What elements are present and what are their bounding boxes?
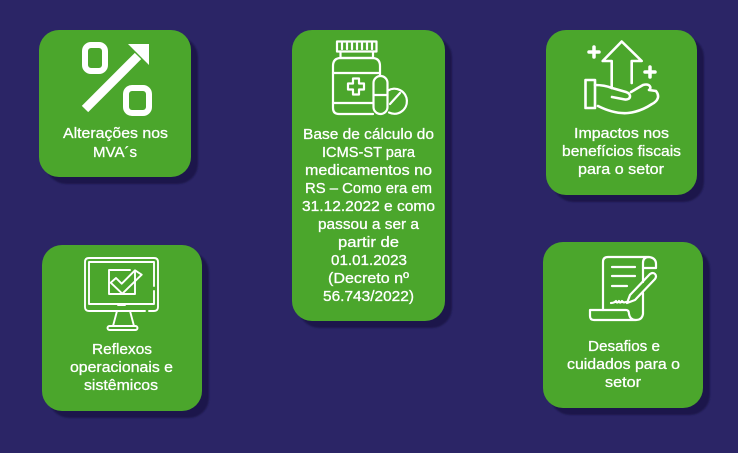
label: Base de cálculo do ICMS-ST text: Base de cálculo do — [303, 126, 434, 143]
label: Base de cálculo do ICMS-ST text: passou a ser a — [318, 216, 420, 233]
panel: Alterações nos MVA´s — [39, 30, 198, 184]
label: Desafios e cuidados para o setor: setor — [605, 374, 641, 391]
label: Base de cálculo do ICMS-ST text: ICMS-ST para — [322, 144, 416, 161]
label: Base de cálculo do ICMS-ST text: 31.12.2022 e como — [302, 198, 435, 215]
label: Impactos nos benefícios fiscais para o setor: para o setor — [578, 161, 664, 178]
label: Impactos nos benefícios fiscais para o setor: Impactos nos — [574, 125, 669, 142]
label: Base de cálculo do ICMS-ST text: (Decreto nº — [328, 270, 410, 287]
label: Alterações nos MVA´s — [63, 125, 168, 161]
label: Alterações nos MVA´s: MVA´s — [93, 144, 137, 161]
label: Reflexos operacionais e sistêmicos: Reflexos — [92, 341, 152, 358]
icon: hand with up arrow and sparkles — [586, 42, 658, 113]
icon: monitor with checkmark — [85, 258, 158, 330]
label: Alterações nos MVA´s: Alterações nos — [63, 125, 168, 142]
panel: Base de cálculo do ICMS-ST — [292, 30, 452, 328]
label: Desafios e cuidados para o setor — [567, 338, 680, 391]
label: Impactos nos benefícios fiscais para o setor: benefícios fiscais — [562, 143, 681, 160]
label: Base de cálculo do ICMS-ST text: 01.01.2023 — [331, 252, 407, 269]
label: Base de cálculo do ICMS-ST text: 56.743/2022) — [323, 288, 414, 305]
label: Base de cálculo do ICMS-ST text: medicamentos no — [305, 162, 432, 179]
panel: Reflexos operacionais e sistêmicos — [42, 245, 209, 418]
label: Reflexos operacionais e sistêmicos: sistêmicos — [84, 377, 158, 394]
label: Reflexos operacionais e sistêmicos: operacionais e — [70, 359, 173, 376]
label: Base de cálculo do ICMS-ST text: RS – Como era em — [305, 180, 432, 197]
label: Base de cálculo do ICMS-ST text — [302, 126, 435, 305]
label: Reflexos operacionais e sistêmicos — [70, 341, 173, 394]
label: Impactos nos benefícios fiscais para o setor — [562, 125, 681, 178]
icon: document scroll with pen — [590, 257, 656, 320]
label: Desafios e cuidados para o setor: cuidados para o — [567, 356, 680, 373]
panel: Impactos nos benefícios fiscais — [546, 30, 704, 202]
label: Desafios e cuidados para o setor: Desafios e — [588, 338, 660, 355]
panel: Desafios e cuidados para o setor — [543, 242, 710, 415]
label: Base de cálculo do ICMS-ST text: partir de — [338, 234, 399, 251]
icon: percent with rising arrow — [85, 44, 149, 113]
icon: medicine bottle with pills — [333, 42, 407, 114]
